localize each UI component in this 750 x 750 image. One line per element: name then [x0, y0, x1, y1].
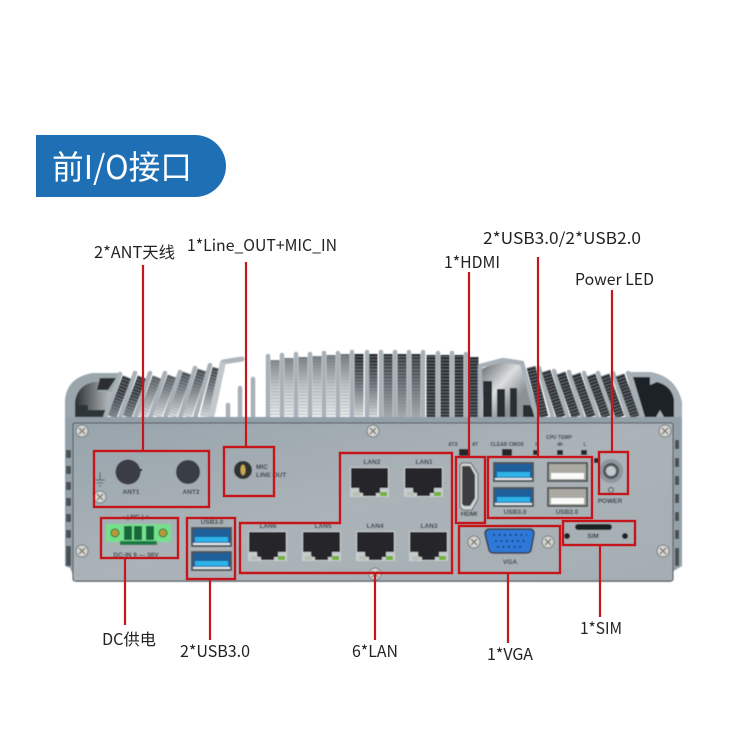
switches and indicator labels: AT — [472, 442, 478, 448]
centre wedge — [479, 360, 542, 420]
DC power connector: - | NC | + — [123, 514, 149, 521]
front plate — [73, 423, 673, 581]
switches and indicator labels: H — [535, 442, 539, 448]
red leader lines — [125, 257, 612, 643]
rear USB ports — [493, 462, 588, 516]
label: VGA: 1*VGA — [487, 641, 533, 665]
label: HDMI: 1*HDMI — [444, 249, 500, 273]
switches and indicator labels: CPU TEMP — [546, 435, 573, 441]
right slanted fins — [522, 363, 642, 418]
left USB 3.0 ports: USB3.0 — [201, 519, 224, 526]
audio jack: LINE OUT — [256, 472, 286, 479]
HDMI port: HDMI — [461, 511, 477, 518]
side notches — [66, 440, 679, 566]
power button — [598, 459, 623, 505]
label: LAN: 6*LAN — [352, 638, 398, 662]
DC power connector — [106, 514, 171, 559]
chassis body — [65, 417, 682, 582]
LAN ports — [248, 459, 448, 561]
heat sink fins — [65, 352, 682, 423]
LAN ports: LAN6 — [260, 523, 277, 530]
audio jack: MIC — [256, 464, 268, 471]
label: SIM: 1*SIM — [580, 615, 622, 639]
LAN ports: LAN4 — [367, 523, 384, 530]
LAN ports: LAN3 — [421, 523, 438, 530]
red callout boxes — [94, 447, 635, 579]
antenna ports: ANT1 — [123, 489, 140, 496]
switches and indicator labels: ATX — [448, 442, 458, 448]
SIM slot: SIM — [587, 533, 599, 540]
title banner — [36, 135, 226, 197]
LAN ports: LAN5 — [315, 523, 332, 530]
left wedge fin — [223, 359, 242, 362]
vertical fins: shaded gaps — [275, 354, 345, 418]
SIM slot — [564, 524, 628, 540]
antenna ports: ANT2 — [183, 489, 200, 496]
left slanted fins — [112, 377, 142, 417]
rear USB ports: USB3.0 — [504, 509, 527, 516]
audio jack — [234, 461, 286, 479]
device: fanless industrial computer front panel — [65, 352, 682, 582]
panel screws — [76, 425, 671, 580]
LAN ports: LAN1 — [416, 459, 433, 466]
VGA port: VGA — [503, 559, 517, 566]
label: power LED: Power LED — [575, 266, 654, 290]
switches and indicator labels: -M- — [556, 442, 564, 448]
right corner cap — [628, 372, 682, 423]
left corner cap — [65, 373, 122, 423]
label: DC power: DC供电 — [102, 626, 156, 650]
label: USB group: 2*USB3.0/2*USB2.0 — [483, 225, 641, 249]
title banner: 前I/O接口 — [52, 141, 192, 189]
DC power connector: DC-IN 9 — 36V — [113, 552, 159, 559]
vertical fins — [228, 352, 466, 418]
left USB 3.0 ports — [191, 519, 232, 571]
antenna ports — [94, 460, 200, 503]
switches and indicator labels: CLEAR CMOS — [490, 442, 524, 448]
label: antenna: 2*ANT天线 — [94, 239, 175, 263]
label: USB3.0: 2*USB3.0 — [180, 638, 250, 662]
switches and indicator labels — [448, 435, 600, 463]
LAN ports: LAN2 — [364, 459, 381, 466]
HDMI port — [460, 463, 478, 518]
rear USB ports: USB2.0 — [556, 509, 579, 516]
switches and indicator labels: L — [583, 442, 587, 448]
label: audio: 1*Line_OUT+MIC_IN — [187, 232, 337, 256]
VGA port — [468, 529, 554, 566]
power button: POWER — [598, 498, 623, 505]
